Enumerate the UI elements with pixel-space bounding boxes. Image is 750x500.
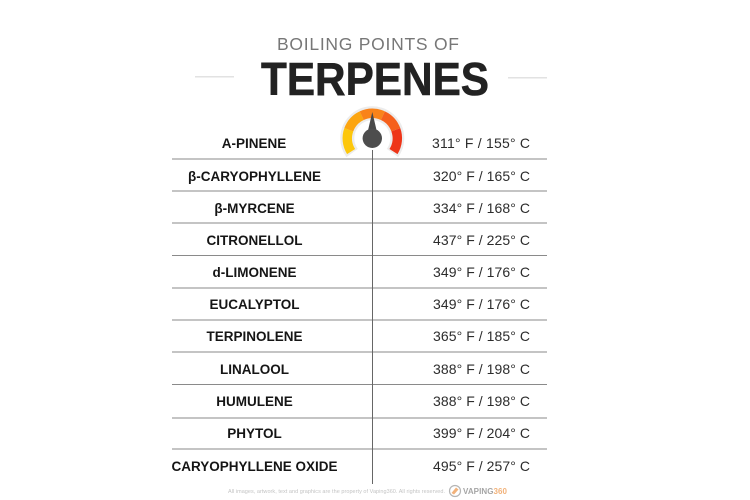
boiling point values: 388° F / 198° C	[433, 361, 530, 377]
footer copyright: All images, artwork, text and graphics are the property of Vaping360. All rights reserved.	[228, 489, 445, 495]
terpene names: EUCALYPTOL	[209, 297, 300, 312]
terpene names: β-MYRCENE	[214, 201, 295, 216]
boiling point values: 311° F / 155° C	[432, 135, 530, 151]
boiling point values: 437° F / 225° C	[433, 232, 530, 248]
boiling point values: 320° F / 165° C	[433, 168, 530, 184]
logo wordmark: VAPING360	[463, 487, 508, 496]
left title rule	[195, 76, 234, 78]
boiling point values: 334° F / 168° C	[433, 200, 530, 216]
terpene names: PHYTOL	[227, 426, 282, 441]
terpene names: HUMULENE	[216, 394, 293, 409]
terpene names: CARYOPHYLLENE OXIDE	[172, 459, 338, 474]
boiling point values: 399° F / 204° C	[433, 425, 530, 441]
terpene names: A-PINENE	[222, 136, 286, 151]
terpene names: CITRONELLOL	[206, 233, 302, 248]
boiling point values: 495° F / 257° C	[433, 458, 530, 474]
table grid lines	[172, 150, 547, 484]
boiling point values: 349° F / 176° C	[433, 296, 530, 312]
boiling point values: 388° F / 198° C	[433, 393, 530, 409]
terpene names	[172, 136, 338, 474]
boiling point values	[432, 135, 530, 474]
icon: temperature gauge	[347, 112, 397, 153]
title: terpenes: TERPENES	[261, 53, 489, 105]
icon: vaping360 logo	[450, 486, 460, 496]
boiling point values: 365° F / 185° C	[433, 328, 530, 344]
terpene names: TERPINOLENE	[206, 329, 303, 344]
terpene names: β-CARYOPHYLLENE	[188, 169, 321, 184]
heading: boiling points of: BOILING POINTS OF	[277, 34, 459, 54]
boiling point values: 349° F / 176° C	[433, 264, 530, 280]
terpene names: LINALOOL	[220, 362, 289, 377]
right title rule	[508, 77, 547, 78]
terpene names: d-LIMONENE	[212, 265, 296, 280]
